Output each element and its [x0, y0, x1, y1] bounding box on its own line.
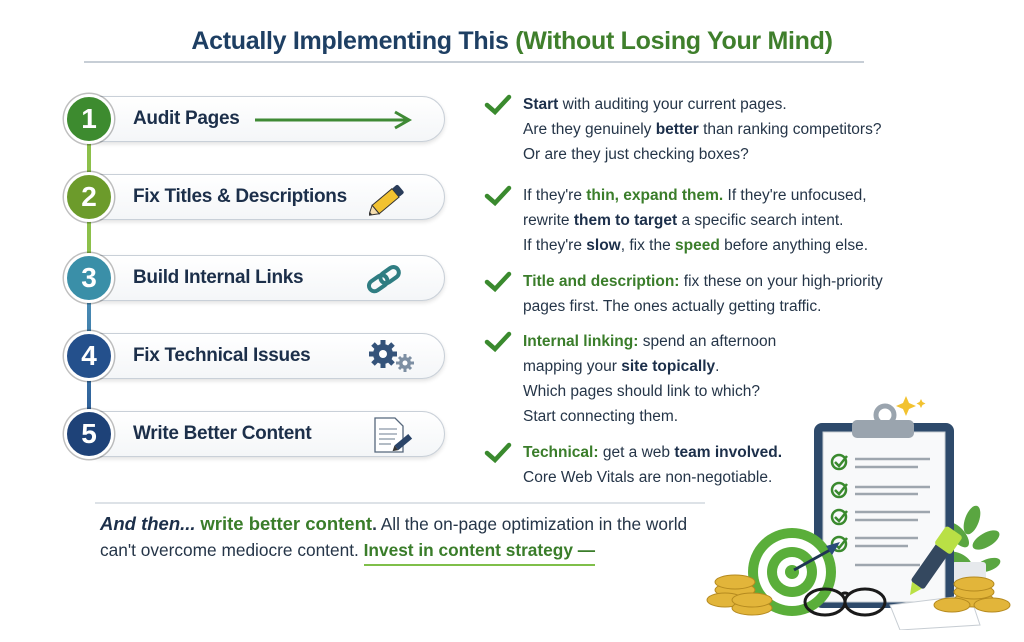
step 4 number: 4 — [81, 340, 97, 371]
checklist item 5: Core Web Vitals are non-negotiable. — [523, 469, 772, 486]
step 1 number: 1 — [81, 103, 97, 134]
step 4 pill: Fix Technical Issues — [133, 345, 310, 366]
coins — [707, 575, 1010, 615]
checklist item 5 — [484, 442, 782, 486]
step 2 number: 2 — [81, 181, 97, 212]
checklist item 4: Internal linking: spend an afternoon — [523, 333, 776, 350]
highlighter — [902, 525, 963, 601]
step 1 pill: Audit Pages — [133, 108, 240, 129]
checklist item 3: pages first. The ones actually getting traffic. — [523, 298, 821, 315]
step 2 pill — [78, 174, 445, 220]
target — [748, 528, 836, 616]
checklist item 2 — [484, 186, 868, 254]
checklist item 3 — [484, 272, 883, 315]
step 2 pill: Fix Titles & Descriptions — [133, 186, 347, 207]
plant — [943, 504, 1002, 575]
checklist item 5: Technical: get a web team involved. — [523, 444, 782, 461]
clipboard — [814, 423, 954, 608]
icon: chain link — [366, 265, 401, 294]
step 2 number — [64, 172, 114, 222]
step 1 pill — [78, 96, 445, 142]
checklist item 1: Are they genuinely better than ranking competitors? — [523, 121, 881, 138]
step 4 pill — [78, 333, 445, 379]
step 4 number — [64, 331, 114, 381]
icon: pencil — [369, 184, 404, 216]
step 3 number: 3 — [81, 262, 97, 293]
checklist item 4: Start connecting them. — [523, 408, 678, 425]
closing statement — [100, 513, 687, 566]
checklist item 3: Title and description: fix these on your high-priority — [523, 273, 883, 290]
illustration: clipboard with target, coins, plant — [706, 396, 1010, 630]
checklist item 1: Start with auditing your current pages. — [523, 96, 787, 113]
step 3 pill — [78, 255, 445, 301]
checklist item 4 — [484, 332, 776, 425]
closing statement: And then... write better content. All the on-page optimization in the world — [100, 513, 687, 534]
step 1 number — [64, 94, 114, 144]
step 5 pill: Write Better Content — [133, 423, 311, 444]
timeline connector — [87, 140, 91, 420]
checklist item 2: rewrite them to target a specific search intent. — [523, 212, 843, 229]
step 5 number — [64, 409, 114, 459]
checklist item 1 — [484, 94, 881, 163]
checklist item 2: If they're slow, fix the speed before anything else. — [523, 237, 868, 254]
glasses — [805, 589, 885, 615]
icon: document with pen — [374, 417, 412, 453]
checklist item 1: Or are they just checking boxes? — [523, 146, 749, 163]
step 3 number — [64, 253, 114, 303]
step 5 number: 5 — [81, 418, 97, 449]
step 5 pill — [78, 411, 445, 457]
step 3 pill: Build Internal Links — [133, 267, 303, 288]
checklist item 4: Which pages should link to which? — [523, 383, 760, 400]
checklist item 4: mapping your site topically. — [523, 358, 719, 375]
icon: gears — [369, 340, 414, 372]
icon: arrow — [255, 110, 412, 130]
checklist item 2: If they're thin, expand them. If they're unfocused, — [523, 187, 867, 204]
closing statement: can't overcome mediocre content. Invest in content strategy — — [100, 540, 595, 560]
papers — [890, 595, 980, 630]
title: Actually Implementing This (Without Losing Your Mind) — [191, 27, 833, 55]
sparkles — [896, 396, 926, 416]
